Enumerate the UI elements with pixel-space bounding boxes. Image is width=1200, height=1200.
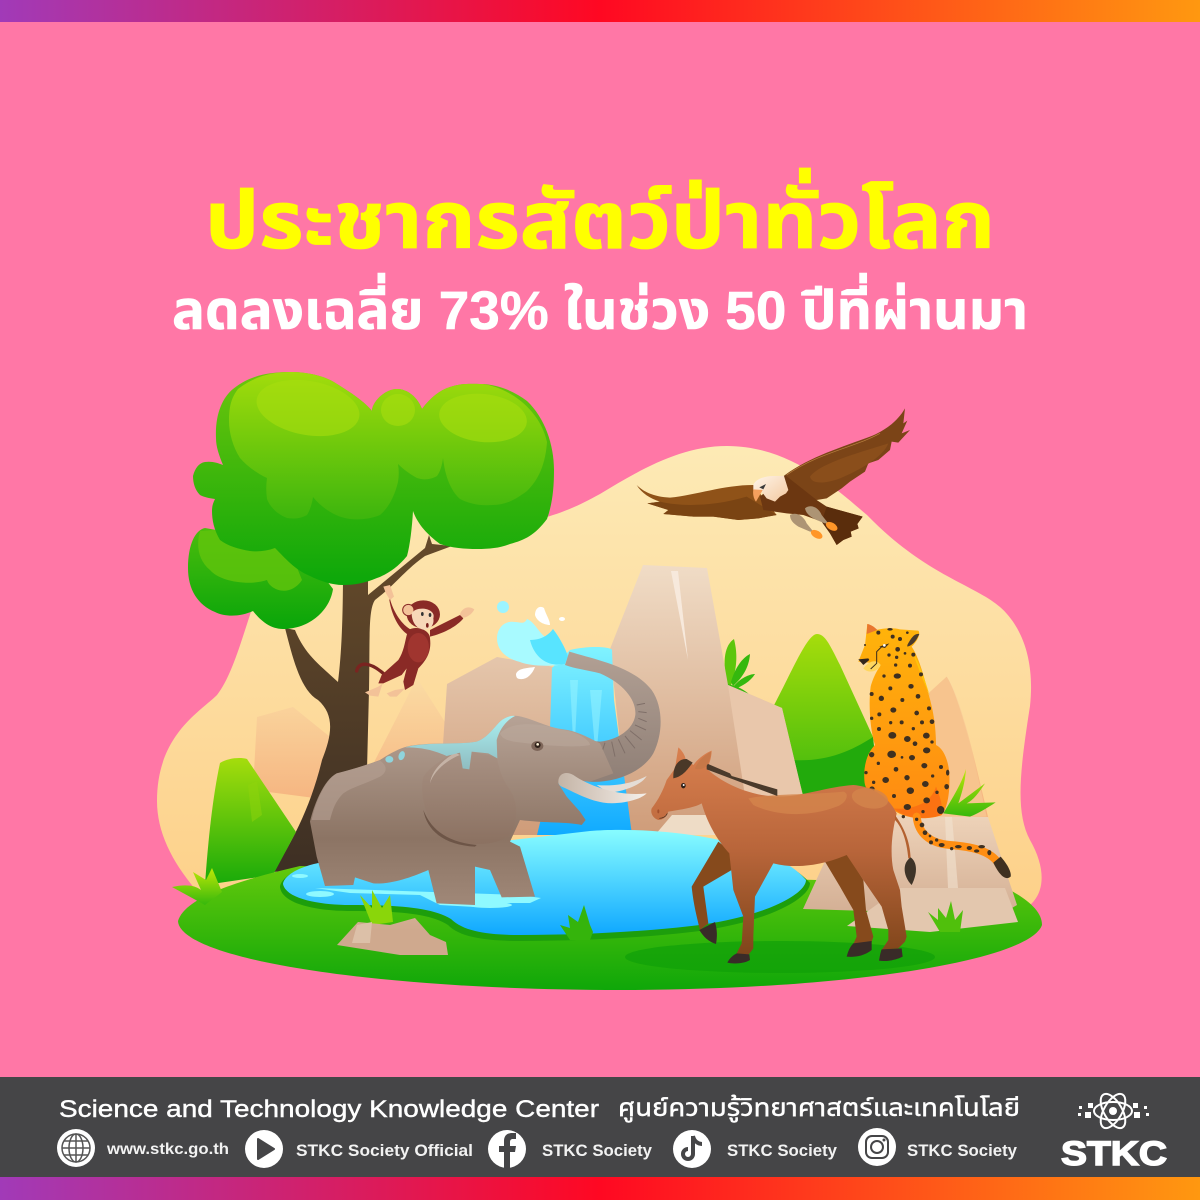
instagram label: STKC Society bbox=[907, 1141, 1018, 1160]
icon: play bbox=[245, 1130, 283, 1168]
icon: facebook bbox=[488, 1130, 526, 1168]
green mountain bbox=[760, 634, 880, 800]
eagle wing highlight bbox=[787, 433, 880, 475]
icon: website globe bbox=[57, 1129, 95, 1167]
logo atom mark bbox=[1078, 1090, 1149, 1132]
elephant trunk wrinkles bbox=[601, 703, 647, 757]
cheetah spots bbox=[864, 628, 949, 818]
plant behind rock bbox=[725, 639, 755, 696]
grass behind cheetah bbox=[943, 769, 996, 817]
cheetah body bbox=[858, 624, 949, 818]
eagle wing shading bbox=[810, 443, 888, 482]
water spray bbox=[497, 601, 568, 679]
elephant body bbox=[310, 716, 613, 905]
illustration: wildlife scene bbox=[157, 372, 1042, 990]
pond ripples bbox=[292, 874, 541, 908]
monkey arms bbox=[389, 599, 463, 637]
tan rock mountains bbox=[437, 565, 803, 835]
horse body highlights bbox=[748, 785, 890, 814]
horse body bbox=[651, 747, 907, 955]
icon: instagram bbox=[858, 1128, 896, 1166]
upper foliage silhouette bbox=[193, 372, 554, 585]
lower left foliage highlight bbox=[198, 530, 302, 591]
cheetah ears bbox=[867, 624, 877, 634]
horse mane bbox=[707, 763, 777, 796]
horse ear inner bbox=[695, 752, 711, 769]
small foreground rock bbox=[337, 918, 448, 955]
eagle tail dark bbox=[822, 507, 863, 545]
STKC logo bbox=[1061, 1090, 1167, 1173]
elephant head highlight bbox=[500, 724, 590, 746]
cheetah nose bbox=[858, 658, 869, 665]
eagle beak bbox=[753, 489, 763, 502]
rocks right bbox=[803, 815, 1018, 932]
green mountain left bbox=[205, 758, 296, 885]
footer heading thai: ศูนย์ความรู้วิทยาศาสตร์และเทคโนโลยี bbox=[618, 1094, 1020, 1123]
eagle right wing bbox=[785, 408, 910, 500]
elephant ear highlight bbox=[430, 753, 460, 783]
monkey tail bbox=[357, 664, 385, 675]
logo wordmark: STKC bbox=[1061, 1135, 1167, 1173]
cream landscape blob bbox=[157, 446, 1042, 905]
subtitle: ลดลงเฉลี่ย 73% ในช่วง 50 ปีที่ผ่านมา bbox=[172, 273, 1028, 341]
grass tufts bbox=[172, 868, 963, 940]
cheetah bbox=[858, 624, 1011, 878]
cheetah eye and tear line bbox=[871, 643, 889, 669]
eagle left wing bbox=[637, 485, 777, 520]
canopy highlights bbox=[252, 372, 529, 446]
lower left foliage bbox=[188, 528, 333, 629]
horse tail bbox=[895, 815, 916, 885]
horse bbox=[651, 747, 916, 963]
website label: www.stkc.go.th bbox=[106, 1141, 229, 1158]
monkey bbox=[357, 585, 474, 697]
youtube label: STKC Society Official bbox=[296, 1141, 473, 1160]
tree canopy bbox=[188, 372, 554, 629]
footer heading english: Science and Technology Knowledge Center bbox=[59, 1096, 599, 1123]
cheetah tail bbox=[915, 817, 1011, 878]
cheetah lower shade bbox=[893, 787, 942, 818]
elephant eye bbox=[531, 741, 543, 751]
monkey hands and feet bbox=[365, 585, 474, 697]
elephant haunch highlight bbox=[312, 761, 386, 820]
tiktok label: STKC Society bbox=[727, 1141, 838, 1160]
horse far legs bbox=[692, 842, 873, 944]
eagle left wing lower feathers bbox=[647, 497, 777, 520]
title: ประชากรสัตว์ป่าทั่วโลก bbox=[205, 168, 995, 265]
faded mountain behind cheetah bbox=[927, 677, 987, 817]
horse far hooves bbox=[699, 922, 872, 957]
monkey head bbox=[403, 600, 440, 630]
faded background mountains bbox=[253, 676, 988, 820]
elephant ear crease bbox=[423, 810, 477, 847]
eagle head bbox=[753, 476, 788, 502]
waterfall bbox=[537, 647, 632, 835]
pond bbox=[280, 830, 810, 941]
ground shadow bbox=[625, 941, 935, 973]
bottom gradient bar bbox=[0, 1177, 1200, 1200]
horse near hooves bbox=[727, 948, 903, 963]
elephant tusk back bbox=[597, 776, 647, 793]
icon: tiktok bbox=[673, 1130, 711, 1168]
elephant bbox=[310, 652, 661, 905]
top gradient bar bbox=[0, 0, 1200, 22]
elephant trunk bbox=[557, 652, 661, 782]
facebook label: STKC Society bbox=[542, 1141, 653, 1160]
eagle eye bbox=[759, 484, 766, 489]
elephant tusk front bbox=[558, 773, 647, 803]
eagle legs bbox=[790, 506, 839, 541]
water on back bbox=[405, 716, 515, 769]
footer bar bbox=[0, 1077, 1200, 1177]
monkey belly bbox=[408, 633, 429, 662]
cheetah yellow shine bbox=[912, 650, 930, 697]
elephant ear bbox=[422, 752, 516, 844]
eagle bbox=[637, 408, 910, 545]
monkey body bbox=[378, 628, 430, 690]
eagle body and tail bbox=[760, 475, 863, 545]
cheetah muzzle bbox=[863, 661, 881, 672]
horse forelock bbox=[673, 759, 693, 778]
horse face details bbox=[657, 783, 686, 818]
tree trunk and branches bbox=[273, 535, 452, 872]
grassy island bbox=[178, 866, 1042, 990]
upper foliage light layer bbox=[229, 372, 547, 519]
water drops on back bbox=[385, 750, 406, 763]
